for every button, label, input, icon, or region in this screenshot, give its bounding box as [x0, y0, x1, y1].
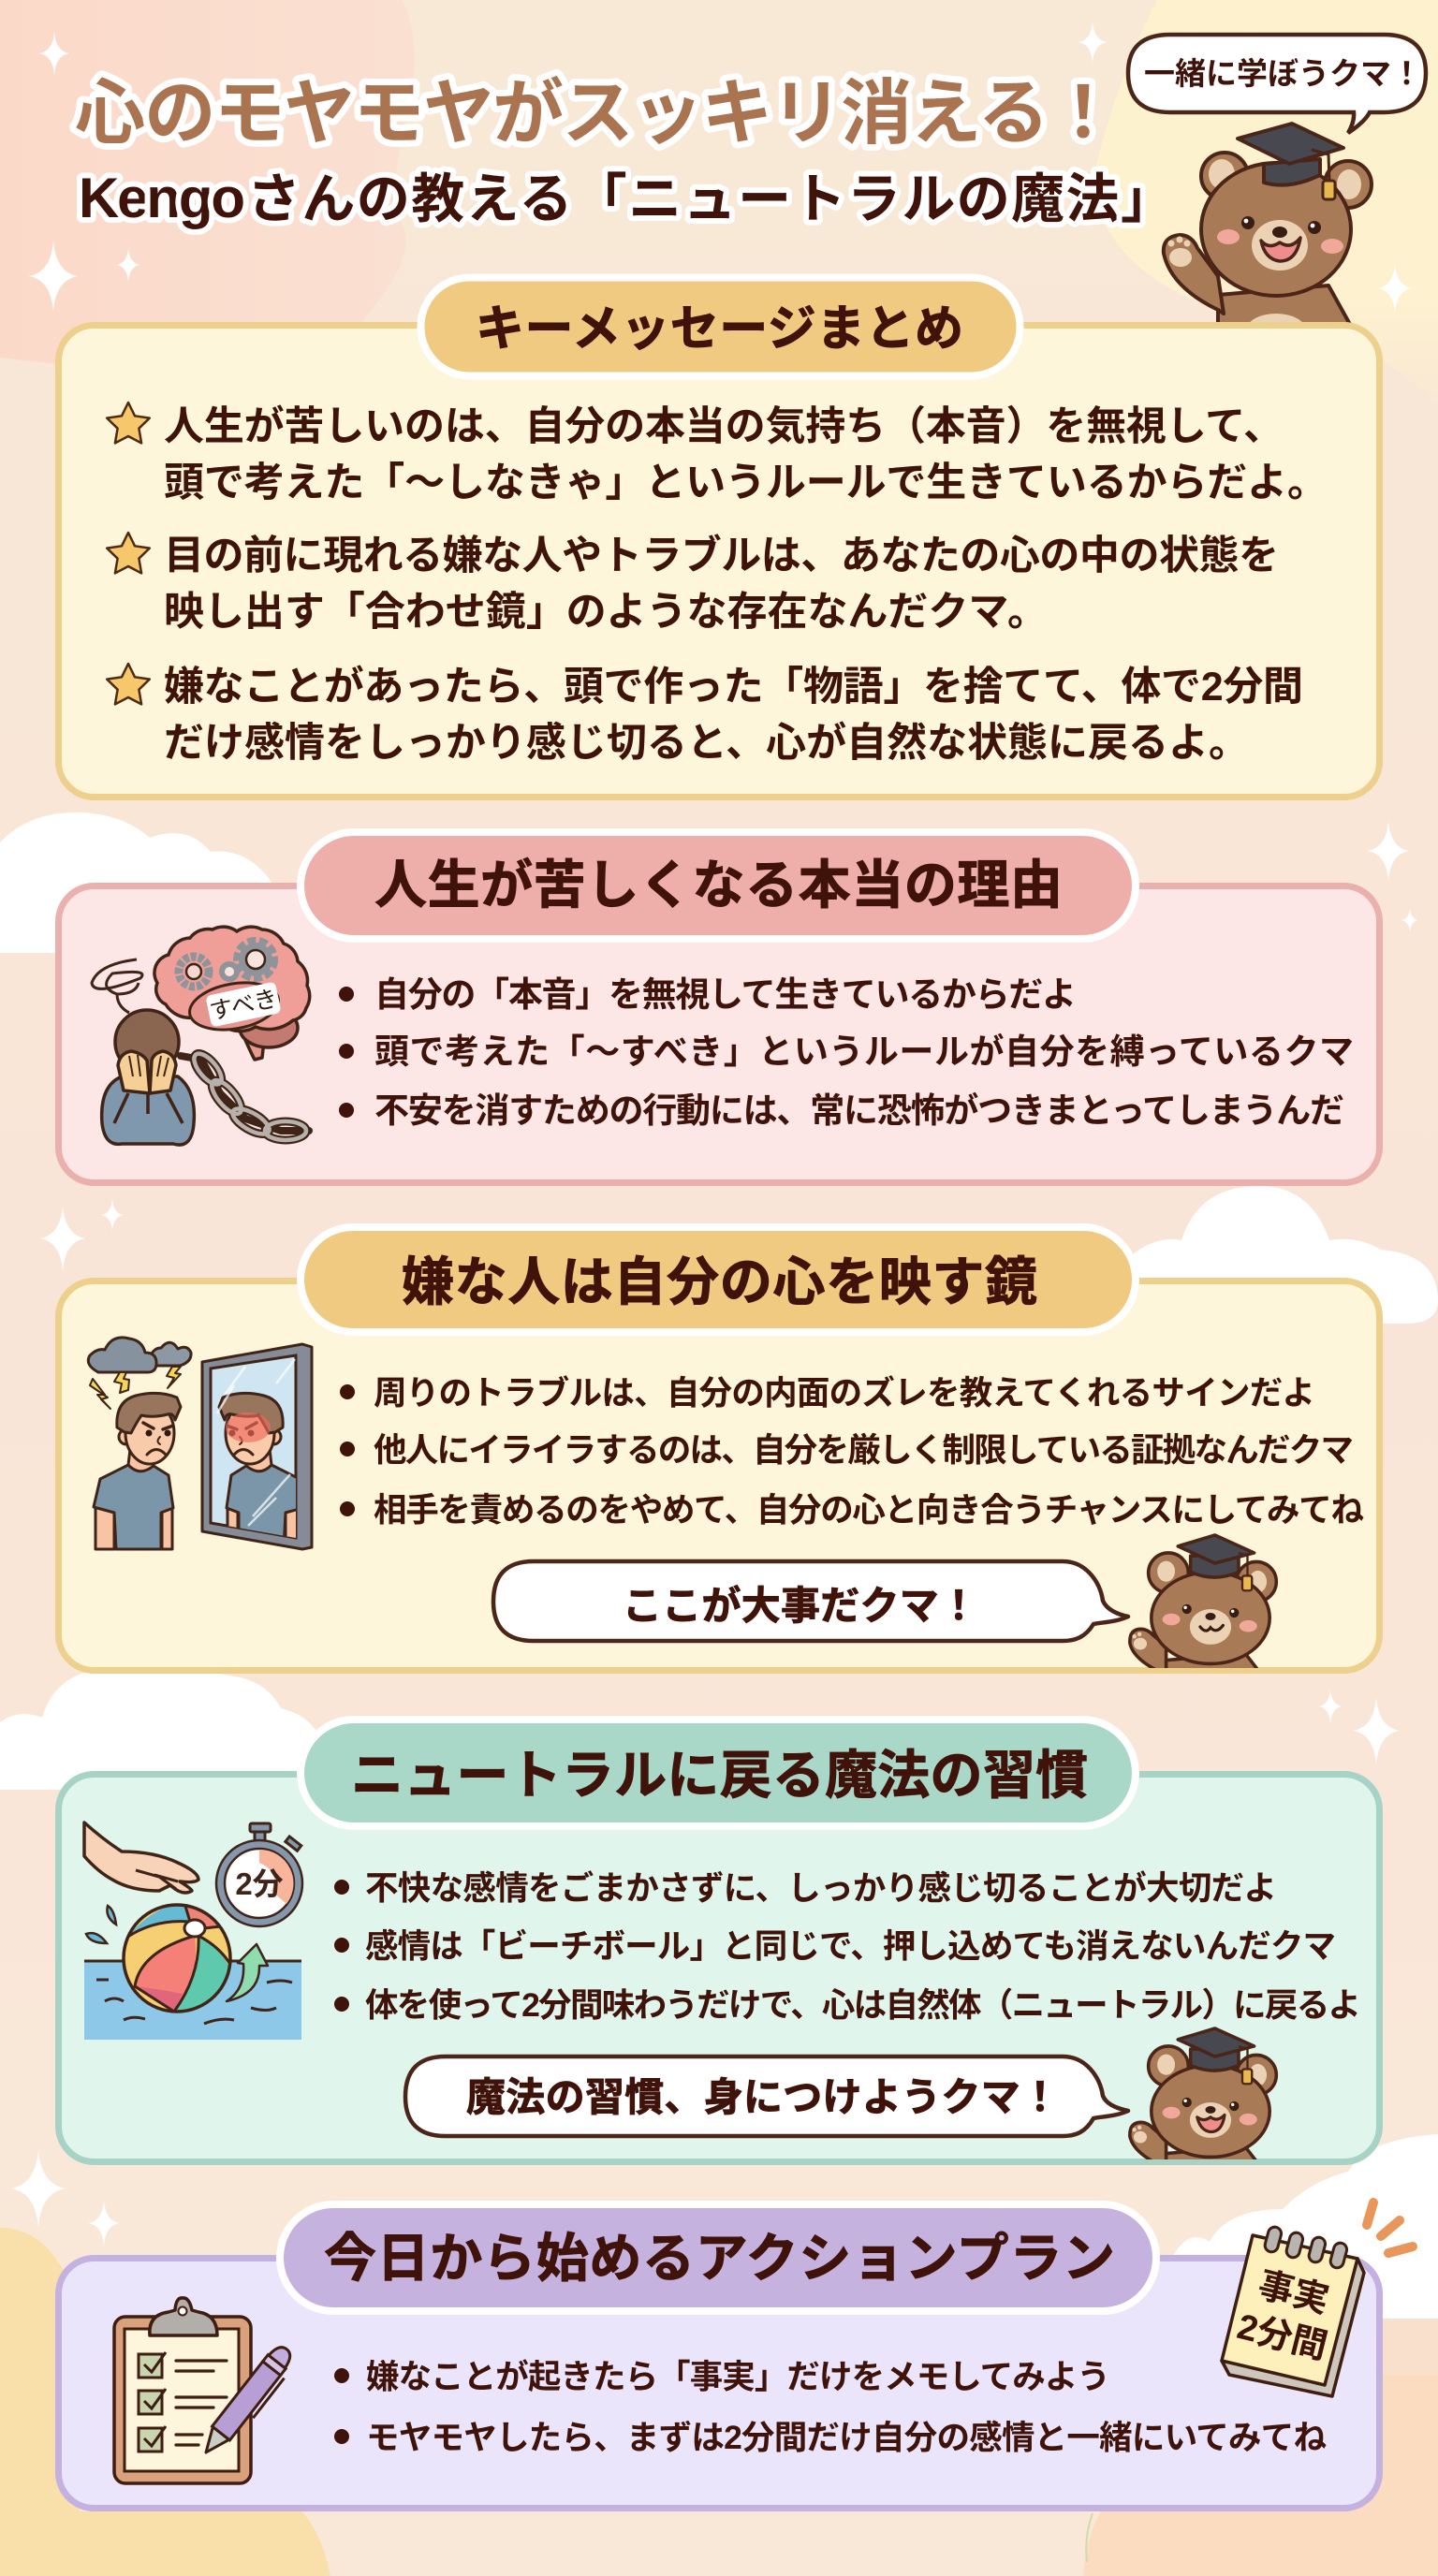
notebook: facts and 2 minutes: 事実: [1255, 2265, 1332, 2321]
bullet list: action plan: 嫌なことが起きたら「事実」だけをメモしてみよう: [366, 2358, 1110, 2395]
rays: notebook: [1367, 2203, 1413, 2253]
message 1: [107, 402, 1328, 505]
bullet list: neutral habit: [334, 1869, 1361, 2024]
heading: mirror: 嫌な人は自分の心を映す鏡: [402, 1252, 1037, 1311]
heading: key messages: キーメッセージまとめ: [476, 302, 963, 357]
heading: action plan: [280, 2204, 1156, 2311]
mascot: bear top: [1164, 124, 1372, 347]
bullet list: neutral habit: 不快な感情をごまかさずに、しっかり感じ切ることが大切だよ: [365, 1869, 1277, 1907]
message 1: 頭で考えた「〜しなきゃ」というルールで生きているからだよ。: [164, 461, 1328, 505]
bullet list: real reason: 自分の「本音」を無視して生きているからだよ: [374, 975, 1077, 1014]
bullet list: neutral habit: 体を使って2分間味わうだけで、心は自然体（ニュートラル）に戻るよ: [365, 1986, 1361, 2024]
panel: mirror: [58, 1227, 1380, 1676]
panel: key messages: [58, 277, 1380, 798]
message 2: [107, 533, 1279, 635]
heading: neutral habit: [301, 1720, 1136, 1826]
bullet list: neutral habit: 感情は「ビーチボール」と同じで、押し込めても消えないんだクマ: [365, 1927, 1336, 1965]
illustration: clipboard and pen: [114, 2298, 300, 2483]
illustration: stressed person, brain and chain: [92, 927, 310, 1145]
bullet list: real reason: [339, 975, 1354, 1130]
message 3: [107, 664, 1303, 766]
heading: real reason: 人生が苦しくなる本当の理由: [374, 856, 1063, 915]
message 2: 目の前に現れる嫌な人やトラブルは、あなたの心の中の状態を: [164, 534, 1279, 578]
panel: neutral habit: [58, 1720, 1380, 2169]
heading: mirror: [301, 1227, 1136, 1332]
speech bubble: bear top: 一緒に学ぼうクマ！: [1144, 56, 1422, 91]
cloud: behind panel 4: [0, 1666, 330, 1790]
heading: real reason: [301, 832, 1136, 939]
speech bubble: bear top: [1128, 35, 1426, 133]
bullet list: mirror: 相手を責めるのをやめて、自分の心と向き合うチャンスにしてみてね: [374, 1491, 1364, 1529]
bullet list: real reason: 頭で考えた「〜すべき」というルールが自分を縛っているクマ: [374, 1032, 1354, 1071]
heading: key messages: [421, 277, 1020, 376]
panel: action plan: [58, 2203, 1413, 2509]
illustration: beach ball, hand and stopwatch: 2分: [235, 1866, 284, 1901]
title: 心のモヤモヤがスッキリ消える！: [75, 74, 1119, 154]
cloud: behind panel 2: [0, 812, 273, 953]
heading: action plan: 今日から始めるアクションプラン: [324, 2229, 1115, 2288]
subtitle: さんの教える「ニュートラルの魔法」: [247, 169, 1174, 229]
bullet list: real reason: 不安を消すための行動には、常に恐怖がつきまとってしまうんだ: [374, 1091, 1344, 1130]
mascot: bear mirror panel: [1130, 1535, 1276, 1676]
callout: important: [493, 1561, 1128, 1641]
cloud: behind panel 5: [1173, 2134, 1438, 2319]
subtitle: Kengo: [79, 167, 245, 229]
message 2: 映し出す「合わせ鏡」のような存在なんだクマ。: [164, 590, 1048, 635]
bullet list: mirror: 他人にイライラするのは、自分を厳しく制限している証拠なんだクマ: [374, 1431, 1354, 1469]
cloud: behind panel 3: [1133, 1186, 1438, 1324]
message 1: 人生が苦しいのは、自分の本当の気持ち（本音）を無視して、: [164, 404, 1284, 449]
illustration: beach ball, hand and stopwatch: [84, 1822, 302, 2040]
bullet list: action plan: [334, 2358, 1327, 2456]
callout: magic habit: [405, 2056, 1128, 2136]
panel: real reason: [58, 832, 1380, 1183]
message 3: 嫌なことがあったら、頭で作った「物語」を捨てて、体で2分間: [164, 665, 1303, 710]
bullet list: mirror: [340, 1374, 1364, 1529]
notebook: facts and 2 minutes: [1222, 2226, 1364, 2396]
illustration: stressed person, brain and chain: すべき: [207, 986, 280, 1025]
callout: important: ここが大事だクマ！: [623, 1584, 978, 1628]
message 3: だけ感情をしっかり感じ切ると、心が自然な状態に戻るよ。: [164, 721, 1249, 766]
mascot: bear habit panel: [1130, 2028, 1276, 2169]
bullet list: action plan: モヤモヤしたら、まずは2分間だけ自分の感情と一緒にいてみてね: [366, 2419, 1327, 2456]
notebook: facts and 2 minutes: 2分間: [1233, 2307, 1331, 2367]
heading: neutral habit: ニュートラルに戻る魔法の習慣: [351, 1746, 1088, 1805]
illustration: angry man and mirror: [88, 1338, 312, 1549]
callout: magic habit: 魔法の習慣、身につけようクマ！: [466, 2075, 1060, 2119]
bullet list: mirror: 周りのトラブルは、自分の内面のズレを教えてくれるサインだよ: [374, 1374, 1315, 1412]
